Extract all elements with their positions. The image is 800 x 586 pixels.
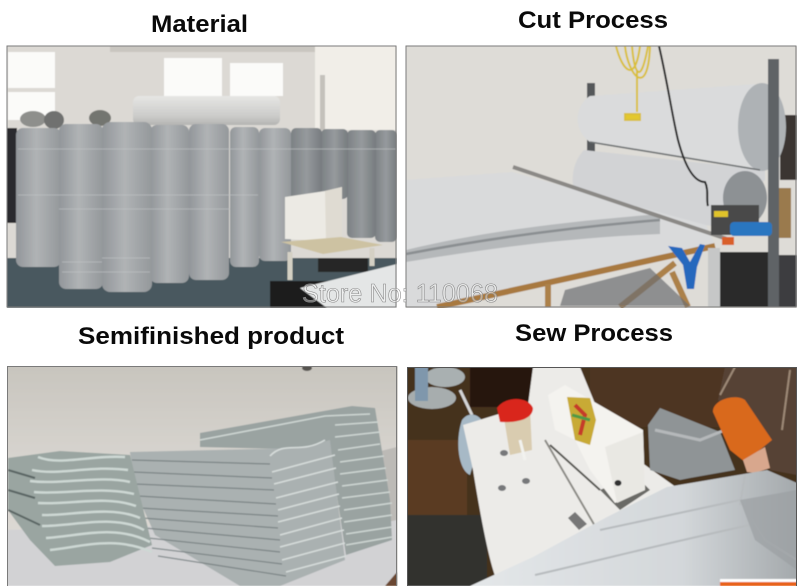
- title: Material: Material: [151, 11, 248, 38]
- hand: [743, 447, 770, 473]
- photo panel: stacked semifinished tarps: [8, 366, 398, 586]
- photo panel: cutting table with rolls: [406, 46, 797, 308]
- icon: lower fabric roll: [573, 150, 767, 226]
- panel border: cut process: [406, 46, 796, 307]
- middle stack: [130, 440, 346, 586]
- photo panel: sewing machine: [408, 368, 796, 586]
- orange sleeve: [713, 397, 772, 462]
- grey cloth behind: [648, 408, 735, 480]
- worker jacket: [718, 367, 797, 475]
- icon: horizontal roll on top: [133, 96, 280, 125]
- silver fabric: [470, 470, 797, 586]
- icon: upper fabric roll: [578, 83, 786, 171]
- thread stand: [408, 367, 485, 475]
- panel border: material: [7, 46, 396, 307]
- black power cable: [659, 46, 708, 206]
- cutting bar: [513, 167, 730, 240]
- panel border: semifinished product: [8, 366, 396, 586]
- photo panel: material rolls in warehouse: [7, 46, 397, 308]
- cutting machine: [711, 205, 772, 245]
- wooden frame: [437, 246, 715, 307]
- orange strip corner: [720, 579, 797, 582]
- panel border: sew process: [408, 368, 796, 586]
- title: Sew Process: Sew Process: [515, 320, 673, 347]
- title: Semifinished product: Semifinished product: [78, 323, 344, 350]
- title: Cut Process: Cut Process: [518, 7, 668, 34]
- left stack: [8, 451, 152, 566]
- cutting table fabric: [406, 172, 715, 307]
- blue clamp: [668, 244, 705, 289]
- sewing table: [463, 367, 680, 586]
- sewing machine: [548, 385, 645, 503]
- oil bottle with red cap: [497, 399, 533, 460]
- back stack: [200, 406, 392, 555]
- icon: computer monitor on desk: [281, 187, 383, 280]
- watermark: Store No: 110068: [302, 278, 498, 308]
- yellow coiled cable: [616, 46, 650, 120]
